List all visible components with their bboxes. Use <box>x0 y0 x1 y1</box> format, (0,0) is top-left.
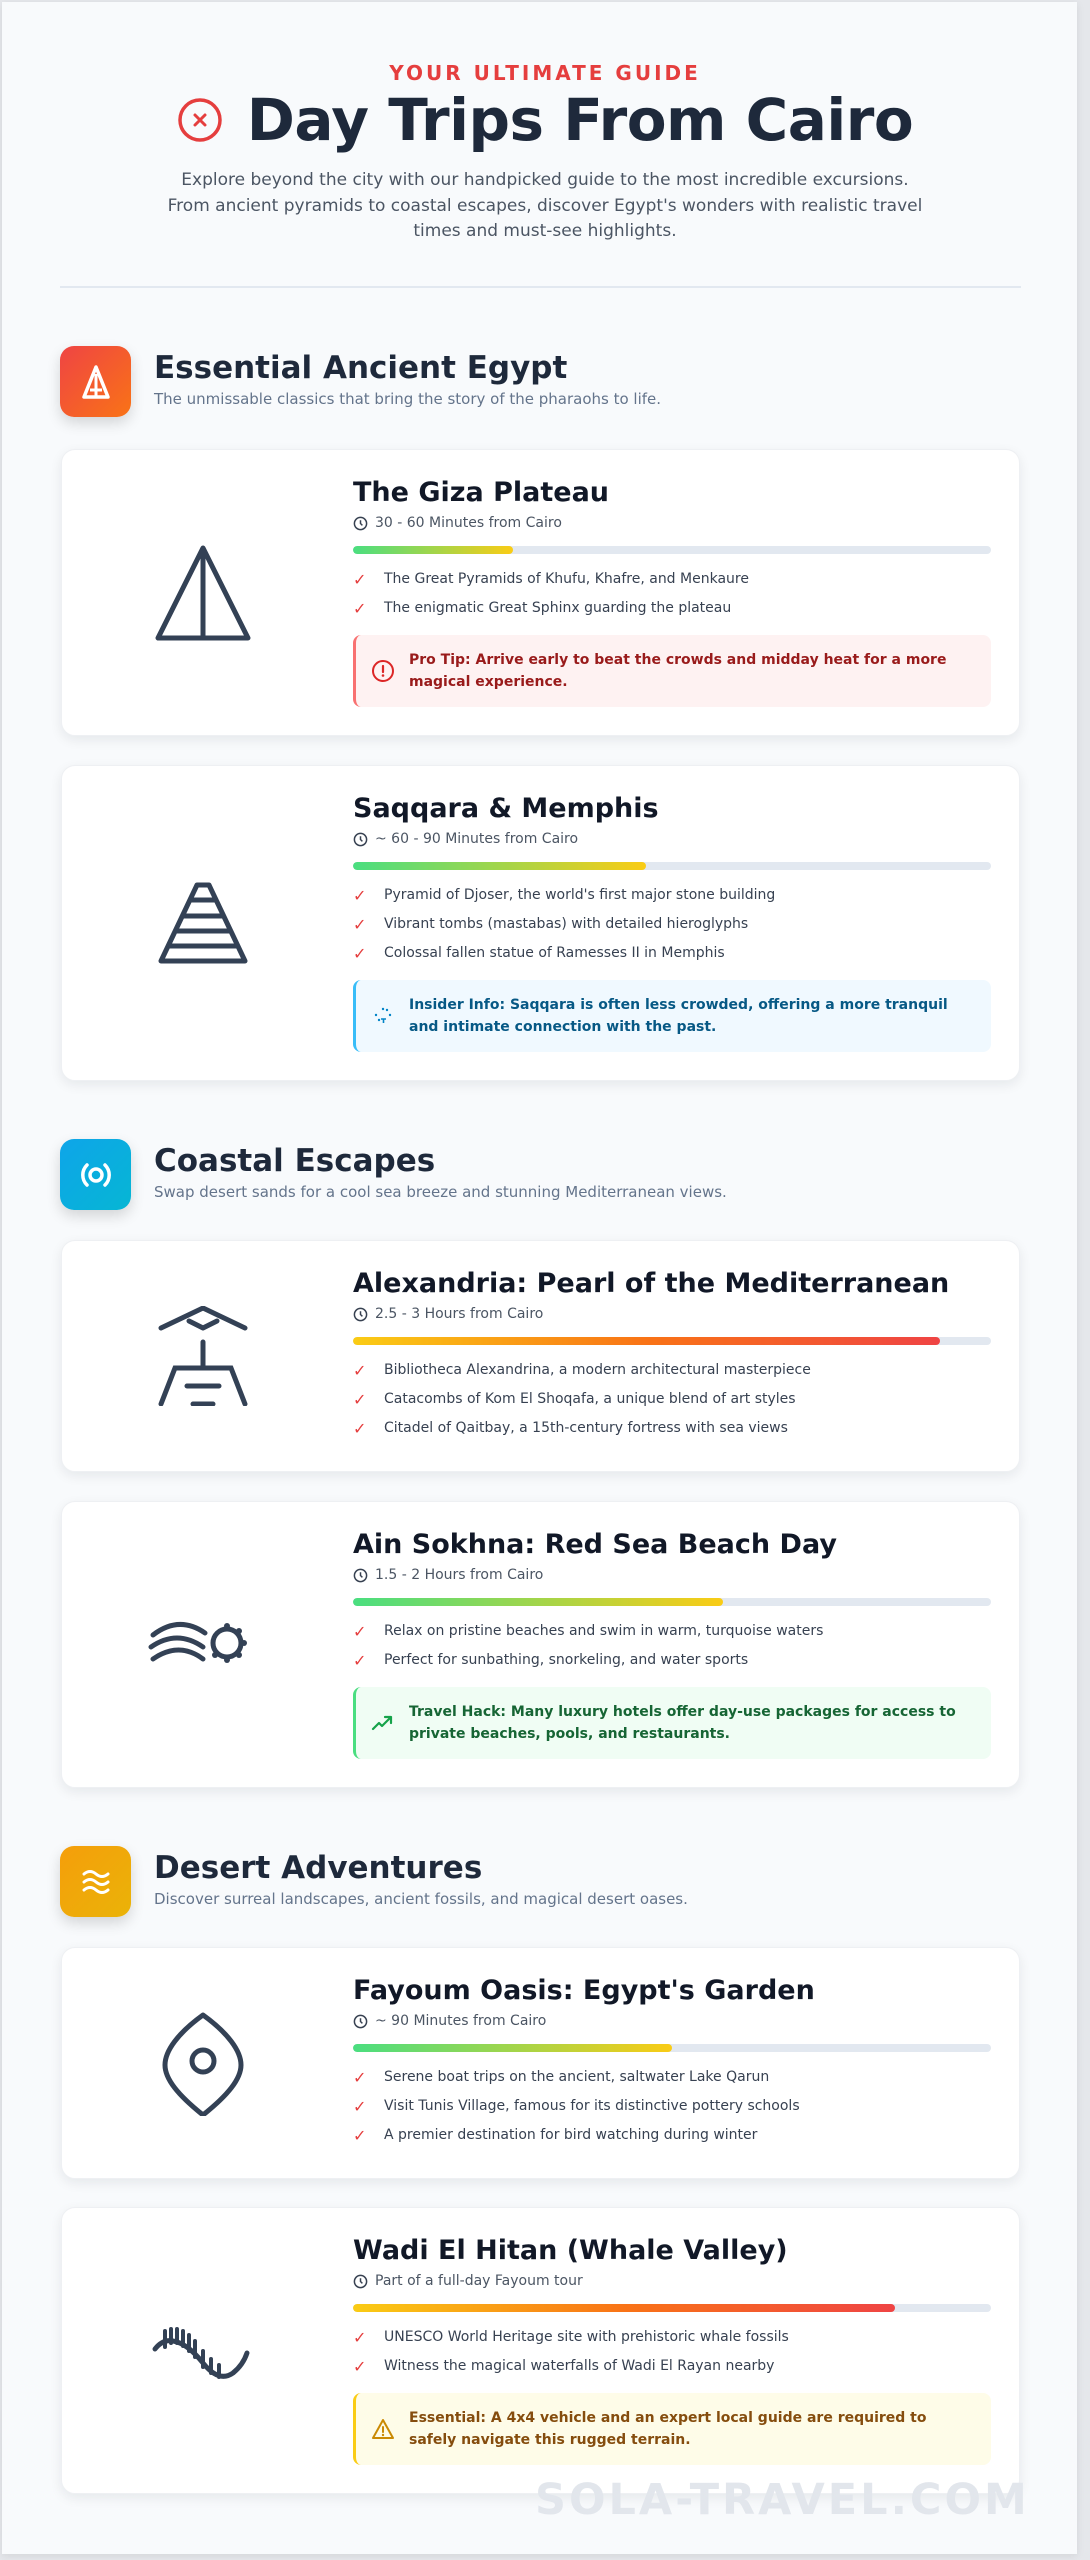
card: Giza Plateau: 30 - 60 Minutes from Cairo <box>375 515 562 531</box>
intro text: times and must-see highlights. <box>413 221 677 241</box>
section header: Desert Adventures: Desert Adventures <box>154 1850 482 1886</box>
card: Wadi El Hitan: UNESCO World Heritage site with prehistoric whale fossils <box>384 2329 789 2345</box>
card: Ain Sokhna <box>61 1501 1020 1788</box>
card: Saqqara & Memphis: Pyramid of Djoser, the world's first major stone building <box>384 887 775 903</box>
card: Saqqara & Memphis: Vibrant tombs (mastabas) with detailed hieroglyphs <box>384 916 748 932</box>
card: Ain Sokhna: Ain Sokhna: Red Sea Beach Day <box>353 1529 837 1560</box>
intro text: Explore beyond the city with our handpicked guide to the most incredible excursions. <box>181 170 909 190</box>
section header: Essential Ancient Egypt: Essential Ancient Egypt <box>154 350 567 386</box>
card: Giza Plateau: The Giza Plateau <box>353 477 609 508</box>
callout: essential <box>353 2393 991 2465</box>
card: Alexandria: 2.5 - 3 Hours from Cairo <box>375 1306 543 1322</box>
card: Alexandria: Catacombs of Kom El Shoqafa, a unique blend of art styles <box>384 1391 796 1407</box>
card: Ain Sokhna: 1.5 - 2 Hours from Cairo <box>375 1567 543 1583</box>
section header: Coastal Escapes: Coastal Escapes <box>154 1143 435 1179</box>
card: Saqqara & Memphis: ✓ <box>353 886 366 905</box>
icon: whale skeleton <box>152 2327 250 2379</box>
icon: oasis pin <box>162 2012 244 2116</box>
card: Ain Sokhna: Relax on pristine beaches and swim in warm, turquoise waters <box>384 1623 823 1639</box>
intro text <box>168 170 922 241</box>
section header: Coastal Escapes: Swap desert sands for a cool sea breeze and stunning Mediterranean views. <box>154 1183 727 1201</box>
callout: essential: Essential: A 4x4 vehicle and an expert local guide are required to safely navigate this rugged terrain. <box>409 2410 926 2448</box>
card: Giza Plateau: ✓ <box>353 570 366 589</box>
card: Wadi El Hitan: Witness the magical waterfalls of Wadi El Rayan nearby <box>384 2358 774 2374</box>
card: Saqqara & Memphis <box>61 765 1020 1081</box>
card: Wadi El Hitan: ✓ <box>353 2328 366 2347</box>
card: Fayoum Oasis: ✓ <box>353 2068 366 2087</box>
card: Fayoum Oasis: Serene boat trips on the ancient, saltwater Lake Qarun <box>384 2069 769 2085</box>
card: Wadi El Hitan: Part of a full-day Fayoum tour <box>375 2273 583 2289</box>
card: Ain Sokhna: Perfect for sunbathing, snorkeling, and water sports <box>384 1652 748 1668</box>
callout: travel hack <box>353 1687 991 1759</box>
icon: waves and sun <box>148 1622 247 1663</box>
section header: Desert Adventures: Discover surreal landscapes, ancient fossils, and magical desert oases. <box>154 1890 688 1908</box>
icon: header x circle <box>178 98 222 142</box>
card: Wadi El Hitan <box>61 2207 1020 2494</box>
icon: signal badge <box>60 1139 131 1210</box>
section header: Essential Ancient Egypt: The unmissable classics that bring the story of the pharaohs to life. <box>154 390 661 408</box>
card: Saqqara & Memphis: ✓ <box>353 915 366 934</box>
watermark: SOLA-TRAVEL.COM <box>535 2475 1030 2525</box>
card: Wadi El Hitan: ✓ <box>353 2357 366 2376</box>
card: Saqqara & Memphis: ~ 60 - 90 Minutes from Cairo <box>375 831 578 847</box>
card: Alexandria: ✓ <box>353 1419 366 1438</box>
callout: travel hack: Travel Hack: Many luxury hotels offer day-use packages for access to private beaches, pools, and restaurants. <box>409 1704 956 1742</box>
card: Alexandria: Alexandria: Pearl of the Mediterranean <box>353 1268 949 1299</box>
kicker: YOUR ULTIMATE GUIDE <box>389 61 701 85</box>
card: Fayoum Oasis: ✓ <box>353 2097 366 2116</box>
title: Day Trips From Cairo <box>247 86 913 154</box>
icon: pyramid badge <box>60 346 131 417</box>
icon: waves badge <box>60 1846 131 1917</box>
section header: Coastal Escapes <box>55 1139 727 1221</box>
icon: lighthouse umbrella <box>158 1306 248 1406</box>
card: Fayoum Oasis: ✓ <box>353 2126 366 2145</box>
card: Giza Plateau: The Great Pyramids of Khufu, Khafre, and Menkaure <box>384 571 749 587</box>
card: Fayoum Oasis: Visit Tunis Village, famous for its distinctive pottery schools <box>384 2098 800 2114</box>
icon: pyramid <box>156 546 250 640</box>
card: Alexandria: ✓ <box>353 1390 366 1409</box>
card: Giza Plateau <box>61 449 1020 736</box>
card: Fayoum Oasis: ~ 90 Minutes from Cairo <box>375 2013 546 2029</box>
card: Saqqara & Memphis: ✓ <box>353 944 366 963</box>
card: Wadi El Hitan: Wadi El Hitan (Whale Valley) <box>353 2235 788 2266</box>
card: Fayoum Oasis: Fayoum Oasis: Egypt's Garden <box>353 1975 815 2006</box>
card: Ain Sokhna: ✓ <box>353 1622 366 1641</box>
section header: Desert Adventures <box>55 1846 688 1928</box>
intro text: From ancient pyramids to coastal escapes, discover Egypt's wonders with realistic travel <box>168 196 922 216</box>
card: Giza Plateau: The enigmatic Great Sphinx guarding the plateau <box>384 600 731 616</box>
callout: insider info: Insider Info: Saqqara is often less crowded, offering a more tranquil and intimate connection with the past. <box>409 997 948 1035</box>
card: Alexandria: ✓ <box>353 1361 366 1380</box>
callout: insider info <box>353 980 991 1052</box>
card: Saqqara & Memphis: Saqqara & Memphis <box>353 793 659 824</box>
card: Fayoum Oasis: A premier destination for bird watching during winter <box>384 2127 757 2143</box>
card: Giza Plateau: ✓ <box>353 599 366 618</box>
card: Ain Sokhna: ✓ <box>353 1651 366 1670</box>
card: Alexandria <box>61 1240 1020 1472</box>
card: Fayoum Oasis <box>61 1947 1020 2179</box>
card: Alexandria: Bibliotheca Alexandrina, a modern architectural masterpiece <box>384 1362 811 1378</box>
card: Alexandria: Citadel of Qaitbay, a 15th-century fortress with sea views <box>384 1420 788 1436</box>
card: Saqqara & Memphis: Colossal fallen statue of Ramesses II in Memphis <box>384 945 725 961</box>
section header: Essential Ancient Egypt <box>55 346 661 428</box>
callout: pro tip <box>353 635 991 707</box>
icon: step pyramid <box>158 882 248 964</box>
callout: pro tip: Pro Tip: Arrive early to beat the crowds and midday heat for a more magical experience. <box>409 652 946 690</box>
